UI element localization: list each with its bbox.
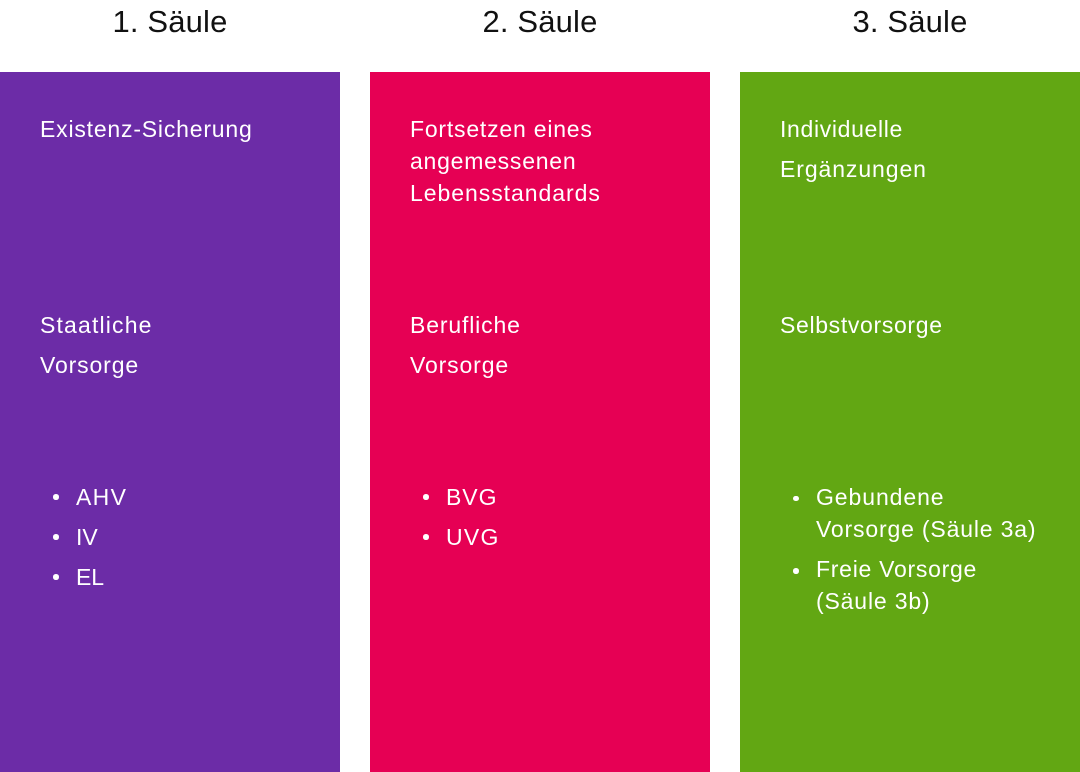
text: purpose bbox=[780, 116, 927, 182]
list: Gebundene und freie Vorsorge bbox=[793, 484, 1036, 614]
text: purpose: Ergänzungen bbox=[780, 156, 927, 182]
list: BVG, UVG: BVG bbox=[446, 484, 497, 510]
text: type bbox=[40, 312, 153, 378]
text: type: Selbstvorsorge bbox=[780, 312, 943, 338]
text: type: Vorsorge bbox=[40, 352, 139, 378]
list: Gebundene und freie Vorsorge: (Säule 3b) bbox=[816, 588, 931, 614]
list: Gebundene und freie Vorsorge: Gebundene bbox=[816, 484, 945, 510]
heading: 2. Säule: 2. Säule bbox=[483, 4, 597, 39]
heading: 3. Säule: 3. Säule bbox=[853, 4, 967, 39]
list: AHV, IV, EL: EL bbox=[76, 564, 104, 590]
list: Gebundene und freie Vorsorge: Vorsorge (Säule 3a) bbox=[816, 516, 1036, 542]
panel: 2. Säule bbox=[370, 72, 710, 772]
list: BVG, UVG bbox=[423, 484, 500, 550]
list: AHV, IV, EL: AHV bbox=[76, 484, 127, 510]
text: purpose: Existenz-Sicherung bbox=[40, 116, 253, 142]
text: type bbox=[410, 312, 521, 378]
panel: 3. Säule bbox=[740, 72, 1080, 772]
text: type: Berufliche bbox=[410, 312, 521, 338]
text: purpose: angemessenen bbox=[410, 148, 576, 174]
list: BVG, UVG: UVG bbox=[446, 524, 500, 550]
heading: 1. Säule: 1. Säule bbox=[113, 4, 227, 39]
list: Gebundene und freie Vorsorge: Freie Vorsorge bbox=[816, 556, 977, 582]
text: purpose: Individuelle bbox=[780, 116, 903, 142]
list: AHV, IV, EL: IV bbox=[76, 524, 98, 550]
text: purpose: Lebensstandards bbox=[410, 180, 601, 206]
text: purpose bbox=[410, 116, 601, 206]
text: purpose: Fortsetzen eines bbox=[410, 116, 593, 142]
panel: 1. Säule bbox=[0, 72, 340, 772]
text: type: Staatliche bbox=[40, 312, 153, 338]
text: type: Vorsorge bbox=[410, 352, 509, 378]
list: AHV, IV, EL bbox=[53, 484, 127, 590]
